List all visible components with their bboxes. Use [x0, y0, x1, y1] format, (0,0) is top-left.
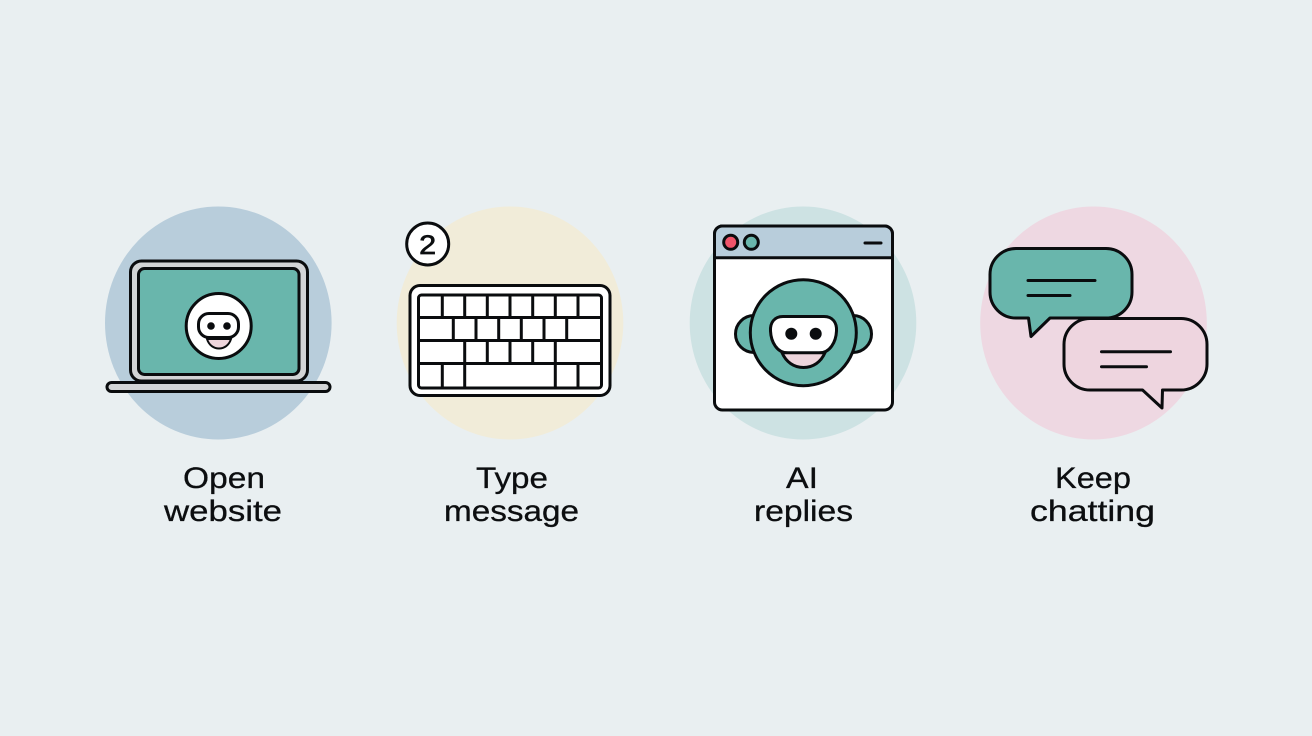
icon: teal speech bubble [990, 248, 1132, 336]
label: AI replies: AI [786, 462, 818, 495]
label: open website: Open [183, 462, 265, 495]
label: keep chatting: chatting [1030, 495, 1155, 528]
label: open website: website [163, 495, 282, 528]
background circle: teal [690, 206, 916, 440]
badge: number 2 [407, 223, 449, 265]
label: AI replies [754, 462, 853, 528]
background circle: pink [980, 206, 1207, 440]
label: type message: message [444, 495, 579, 528]
background circle: blue [105, 206, 332, 440]
icon: browser window with AI face [714, 226, 892, 410]
step 1: open website [105, 206, 332, 528]
icon: keyboard [410, 286, 610, 396]
icon: pink speech bubble [1064, 318, 1207, 408]
label: keep chatting [1030, 462, 1155, 528]
label: AI replies: replies [754, 495, 853, 528]
label: keep chatting: Keep [1055, 462, 1131, 495]
icon: laptop [107, 261, 330, 392]
badge: number 2: 2 [419, 230, 436, 260]
step 3: AI replies [690, 206, 916, 528]
background circle: yellow [397, 206, 623, 440]
label: type message: Type [476, 462, 548, 495]
label: open website [163, 462, 282, 528]
step 4: keep chatting [980, 206, 1207, 528]
step 2: type message [397, 206, 623, 528]
label: type message [444, 462, 579, 528]
